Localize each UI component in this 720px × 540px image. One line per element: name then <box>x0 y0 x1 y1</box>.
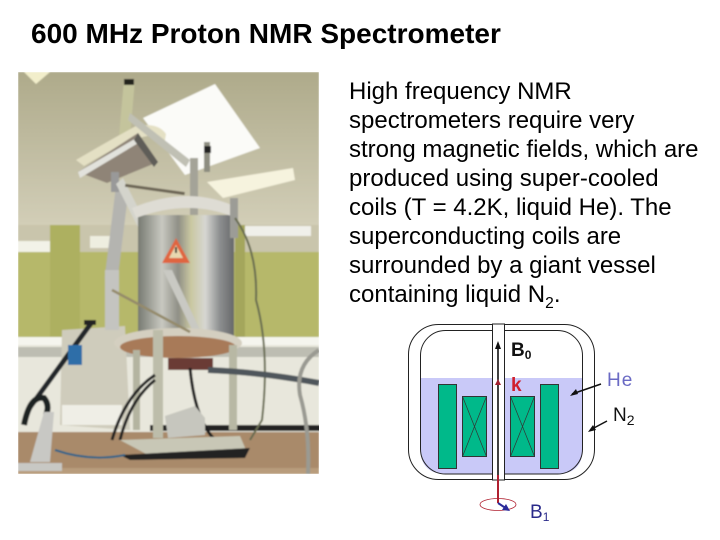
left outer coil <box>438 384 456 468</box>
label: k: k <box>511 375 522 396</box>
label: B0: 0 <box>525 348 532 362</box>
He pointer <box>570 384 601 396</box>
k arrow <box>495 379 501 503</box>
description text: strong magnetic fields, which are <box>349 136 698 163</box>
left inner coil <box>462 396 486 456</box>
label: B1: B <box>530 502 543 523</box>
description text: surrounded by a giant vessel <box>349 252 656 279</box>
label: N2: 2 <box>627 412 635 428</box>
B0 arrow <box>495 341 501 475</box>
B1 precession ellipse <box>480 498 516 510</box>
right outer coil <box>540 384 558 468</box>
description text: spectrometers require very <box>349 107 634 134</box>
photo: NMR spectrometer <box>18 72 319 474</box>
title: 600 MHz Proton NMR Spectrometer <box>31 18 501 49</box>
label: B1: 1 <box>543 510 550 524</box>
outer vessel <box>408 324 594 480</box>
description text: containing liquid N2. <box>349 281 560 312</box>
right inner coil <box>510 396 534 456</box>
B1 arrow <box>498 503 510 511</box>
description text <box>349 78 698 312</box>
inner vessel <box>420 330 582 474</box>
diagram: magnet vessel cross-section <box>408 324 635 524</box>
label: N2: N <box>613 405 627 426</box>
description text: coils (T = 4.2K, liquid He). The <box>349 194 672 221</box>
central bore <box>492 324 504 480</box>
description text: superconducting coils are <box>349 223 621 250</box>
description text: produced using super-cooled <box>349 165 659 192</box>
description text: High frequency NMR <box>349 78 572 105</box>
N2 pointer <box>588 421 607 432</box>
label: B0: B <box>511 340 525 361</box>
label: He: He <box>607 370 633 391</box>
liquid helium fill <box>420 378 582 474</box>
